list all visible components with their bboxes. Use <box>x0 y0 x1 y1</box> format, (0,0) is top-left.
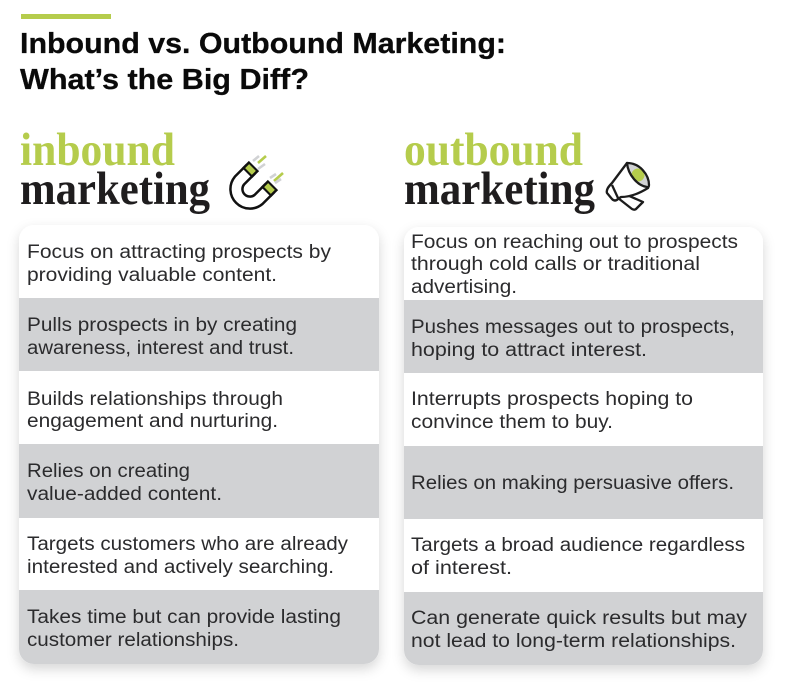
row text: outbound 2: Pushes messages out to prospects, <box>411 317 735 338</box>
heading: outbound marketing <box>404 124 595 215</box>
row text: inbound 2 <box>27 315 297 359</box>
row text: outbound 2 <box>411 317 735 361</box>
row text: outbound 6: not lead to long-term relationships. <box>411 631 736 652</box>
row text: inbound 6 <box>27 607 341 651</box>
row text: inbound 1: providing valuable content. <box>27 265 277 286</box>
row text: outbound 6: Can generate quick results but may <box>411 608 748 629</box>
row text: outbound 5: of interest. <box>411 558 512 579</box>
row text: inbound 5: interested and actively searching. <box>27 557 334 578</box>
row text: outbound 3: Interrupts prospects hoping to <box>411 389 693 410</box>
row text: inbound 4: Relies on creating <box>27 461 190 482</box>
panel: outbound <box>404 227 763 665</box>
heading: outbound marketing: marketing <box>404 163 595 215</box>
row text: outbound 3 <box>411 389 693 433</box>
row text: inbound 5: Targets customers who are already <box>27 534 349 555</box>
row text: outbound 6 <box>411 608 748 652</box>
row text: inbound 1 <box>27 242 332 286</box>
row text: inbound 5 <box>27 534 349 578</box>
row text: outbound 1: through cold calls or traditional <box>411 254 700 275</box>
row text: inbound 4: value-added content. <box>27 484 222 505</box>
row text: inbound 3: engagement and nurturing. <box>27 411 278 432</box>
row text: inbound 1: Focus on attracting prospects by <box>27 242 332 263</box>
row text: outbound 2: hoping to attract interest. <box>411 340 647 361</box>
title: What’s the Big Diff? <box>20 64 309 96</box>
row text: inbound 2: awareness, interest and trust. <box>27 338 294 359</box>
row text: inbound 2: Pulls prospects in by creating <box>27 315 297 336</box>
row text: outbound 1: advertising. <box>411 277 517 298</box>
row text: outbound 5 <box>411 535 745 579</box>
icon: megaphone <box>607 163 649 210</box>
heading: outbound marketing: outbound <box>404 124 583 176</box>
row text: inbound 6: customer relationships. <box>27 630 239 651</box>
row text: inbound 6: Takes time but can provide lasting <box>27 607 341 628</box>
heading: inbound marketing: marketing <box>20 163 210 215</box>
row text: inbound 4 <box>27 461 222 505</box>
row text: outbound 5: Targets a broad audience regardless <box>411 535 745 556</box>
title: Inbound vs. Outbound Marketing: <box>20 28 506 60</box>
row text: outbound 3: convince them to buy. <box>411 412 613 433</box>
heading: inbound marketing <box>20 124 210 215</box>
row text: inbound 3: Builds relationships through <box>27 389 283 410</box>
title <box>20 28 506 96</box>
row text: inbound 3 <box>27 389 283 432</box>
heading: inbound marketing: inbound <box>20 124 175 176</box>
accent bar <box>21 14 111 19</box>
row text: outbound 1 <box>411 232 738 298</box>
icon: magnet <box>236 156 283 203</box>
row text: outbound 1: Focus on reaching out to prospects <box>411 232 738 253</box>
row text: outbound 4: Relies on making persuasive offers. <box>411 473 734 494</box>
panel: inbound <box>19 225 379 664</box>
